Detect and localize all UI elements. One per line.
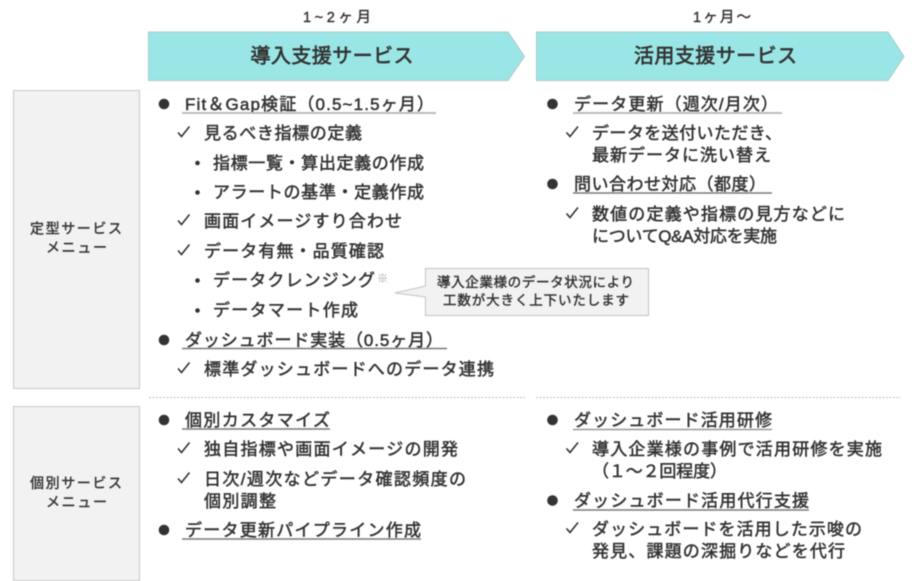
callout: data condition note: 導入企業様のデータ状況により [437, 274, 634, 290]
list: utilization standard menu: 問い合わせ対応（都度） [574, 175, 766, 194]
list: onboarding standard menu: 標準ダッシュボードへのデータ連携 [204, 359, 494, 379]
list: onboarding standard menu: データクレンジング [213, 270, 375, 290]
row label panel: standard service menu [14, 90, 140, 388]
header arrow: onboarding support [148, 32, 524, 80]
list: onboarding standard menu [159, 95, 494, 379]
list: utilization standard menu: データ更新（週次/月次） [574, 94, 778, 114]
header arrow: utilization support: 活用支援サービス [634, 44, 797, 68]
list: onboarding standard menu: データマート作成 [213, 300, 358, 320]
list: onboarding custom menu: 個別調整 [204, 492, 276, 511]
dashed dividers [149, 396, 901, 398]
duration label: utilization: 1ヶ月～ [693, 10, 751, 26]
list: utilization custom menu: 導入企業様の事例で活用研修を実施 [592, 440, 882, 459]
list: utilization standard menu: についてQ&A対応を実施 [592, 227, 777, 246]
list: utilization custom menu: 発見、課題の深掘りなどを代行 [592, 542, 845, 561]
header arrow: utilization support [536, 32, 904, 80]
list: onboarding custom menu: 日次/週次などデータ確認頻度の [204, 469, 466, 489]
list: onboarding custom menu: データ更新パイプライン作成 [185, 520, 421, 540]
row label panel: custom service menu: メニュー [46, 494, 107, 510]
list: onboarding standard menu: データ有無・品質確認 [204, 241, 384, 261]
list: onboarding standard menu: 画面イメージすり合わせ [204, 212, 402, 231]
list: utilization standard menu: 数値の定義や指標の見方などに [592, 205, 845, 224]
list: utilization custom menu: （１～２回程度） [592, 462, 727, 481]
list: utilization custom menu [547, 411, 882, 561]
list: onboarding standard menu: 見るべき指標の定義 [204, 124, 362, 143]
list: utilization custom menu: ダッシュボード活用代行支援 [574, 492, 809, 510]
row label panel: custom service menu [14, 406, 140, 580]
list: onboarding standard menu: ダッシュボード実装（0.5ヶ月） [185, 331, 443, 350]
list: onboarding custom menu: 独自指標や画面イメージの開発 [204, 440, 458, 459]
row label panel: standard service menu: 定型サービス [30, 220, 122, 236]
list: onboarding custom menu [159, 411, 466, 540]
list: onboarding standard menu: アラートの基準・定義作成 [213, 183, 424, 202]
list: onboarding custom menu: 個別カスタマイズ [185, 411, 330, 430]
list: utilization custom menu: ダッシュボードを活用した示唆の [592, 520, 862, 539]
list: onboarding standard menu: 指標一覧・算出定義の作成 [213, 154, 424, 173]
list: onboarding standard menu: ※ [377, 273, 388, 285]
duration label: onboarding: 1~2ヶ月 [303, 10, 371, 26]
list: utilization standard menu [547, 94, 845, 246]
row label panel: standard service menu: メニュー [46, 240, 107, 256]
callout: data condition note: 工数が大きく上下いたします [443, 293, 629, 308]
list: utilization custom menu: ダッシュボード活用研修 [574, 411, 772, 430]
list: utilization standard menu: 最新データに洗い替え [592, 145, 771, 165]
row label panel: custom service menu: 個別サービス [30, 475, 122, 491]
list: utilization standard menu: データを送付いただき、 [592, 123, 782, 143]
header arrow: onboarding support: 導入支援サービス [250, 44, 414, 68]
callout: data condition note [395, 268, 648, 316]
list: onboarding standard menu: Fit＆Gap検証（0.5~1.5ヶ月） [185, 95, 434, 114]
